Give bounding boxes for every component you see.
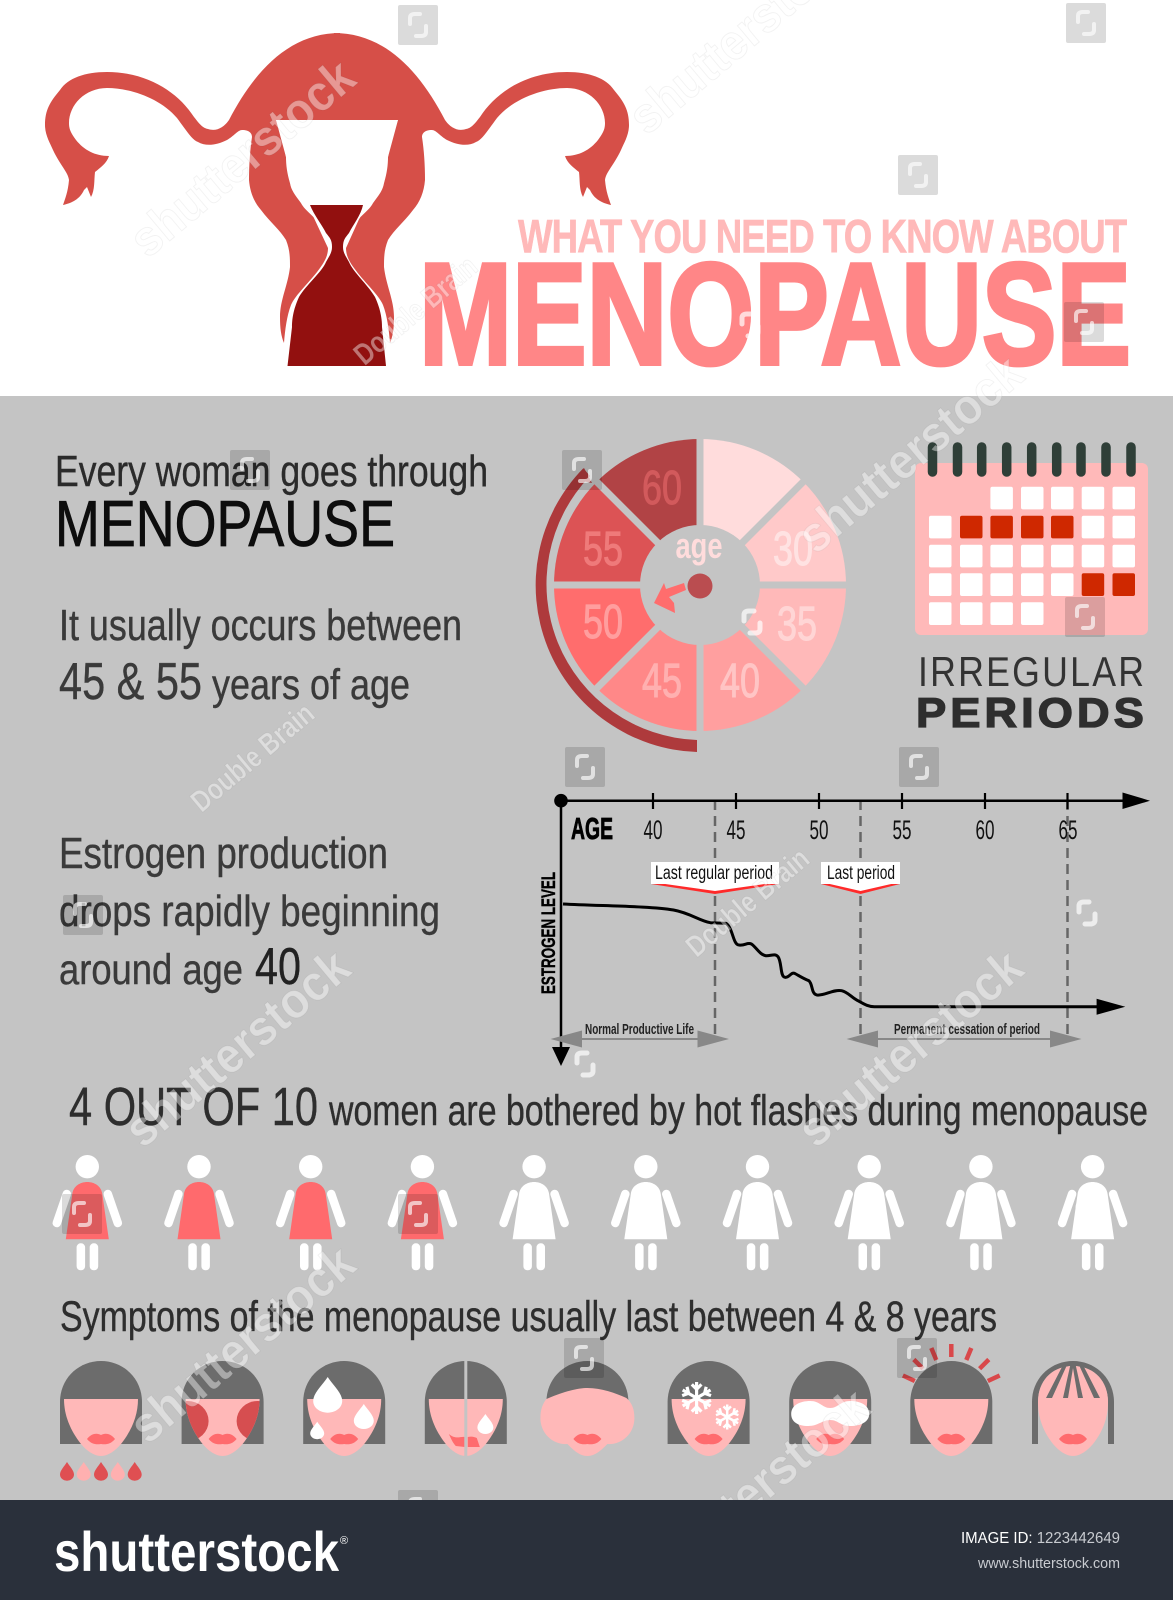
- wheel numbers: 50: [583, 596, 623, 649]
- span arrow: permanent cessation: Permanent cessation of period: [894, 1021, 1040, 1038]
- heading: irregular periods: PERIODS: [916, 690, 1144, 737]
- heading: irregular periods: [916, 649, 1144, 737]
- text block: age range: It usually occurs between: [59, 601, 462, 650]
- main grey panel: [0, 396, 1173, 1500]
- axis labels: 55: [892, 815, 912, 845]
- calendar rings: [932, 447, 1131, 472]
- footer logo: ®: [340, 1535, 348, 1547]
- text block: every woman: Every woman goes through: [55, 447, 488, 496]
- watermark: stock text: shutterstock: [787, 344, 1034, 564]
- callout: last period: [821, 862, 900, 894]
- span arrow: permanent cessation: [846, 1021, 1082, 1048]
- chart: age wheel: [536, 430, 850, 752]
- axes: [552, 792, 1150, 1066]
- wheel centre label: age: [676, 525, 722, 566]
- icon: bloating swollen face: [540, 1361, 634, 1456]
- icon: sweating: [303, 1361, 385, 1456]
- callout: last regular period: [651, 862, 779, 894]
- watermark: stock text: shutterstock: [114, 938, 361, 1158]
- estrogen curve: [563, 904, 1125, 1015]
- calendar period days: [960, 516, 1135, 596]
- text block: age range: 45 & 55: [59, 653, 202, 711]
- icon: chills snowflakes: [668, 1361, 750, 1456]
- heading: 4 out of 10: 4 OUT OF 10: [69, 1077, 318, 1137]
- axis title: estrogen level: ESTROGEN LEVEL: [539, 872, 560, 994]
- wheel numbers: 45: [642, 655, 682, 708]
- text block: every woman: MENOPAUSE: [55, 487, 395, 560]
- woman 2 highlighted: [168, 1155, 230, 1270]
- icon: uterus hourglass: [45, 33, 629, 366]
- watermark: stock text: [114, 0, 1034, 1597]
- text block: estrogen: [59, 829, 440, 996]
- woman 8: [839, 1155, 900, 1270]
- icon: mood swings split face: [425, 1358, 507, 1458]
- calendar days: [929, 487, 1135, 625]
- span arrow: normal productive life: [550, 1021, 729, 1048]
- icon: irregular calendar: [915, 447, 1148, 635]
- dashed guides: [715, 800, 1068, 1037]
- woman 10: [1062, 1155, 1123, 1270]
- watermark: stock text: shutterstock: [119, 48, 366, 268]
- text block: age range: [59, 601, 462, 711]
- watermark: outline marks: [71, 14, 1095, 1225]
- text block: estrogen: around age: [59, 946, 243, 994]
- wheel outer arc arrow: [536, 468, 697, 752]
- footer logo: shutterstock: [54, 1520, 340, 1583]
- woman 6: [615, 1155, 676, 1270]
- axis labels: 45: [726, 815, 746, 845]
- span arrow: normal productive life: Normal Productive Life: [585, 1021, 694, 1038]
- woman 9: [950, 1155, 1011, 1270]
- watermark: author text: Double Brain: [680, 842, 816, 964]
- wheel numbers: 30: [773, 523, 813, 576]
- text block: estrogen: drops rapidly beginning: [59, 887, 440, 936]
- watermark: author text: Double Brain: [185, 697, 321, 819]
- wheel numbers: 55: [583, 523, 623, 576]
- chart: estrogen level over age: [539, 792, 1150, 1066]
- woman 4 highlighted: [392, 1155, 453, 1270]
- wheel numbers: 40: [720, 655, 760, 708]
- heading: irregular periods: IRREGULAR: [918, 649, 1144, 696]
- heading: 4 out of 10: [69, 1077, 1148, 1137]
- axis labels: 50: [810, 815, 828, 845]
- title: what you need to know about: WHAT YOU NEED TO KNOW ABOUT: [518, 210, 1127, 263]
- watermark: author text: Double Brain: [348, 250, 484, 372]
- callout: last regular period: Last regular period: [655, 863, 773, 884]
- axis title: age: AGE: [571, 811, 613, 846]
- woman 5: [504, 1155, 565, 1270]
- icon: irregular bleeding: [60, 1361, 142, 1481]
- text block: estrogen: 40: [255, 938, 301, 996]
- watermark: stock text: shutterstock: [119, 1234, 366, 1454]
- watermark: stock text: shutterstock: [634, 1377, 881, 1597]
- axis labels: [644, 815, 1078, 845]
- woman 1 highlighted: [57, 1155, 118, 1270]
- callout: last period: Last period: [827, 863, 895, 884]
- wheel pointer: [654, 574, 712, 613]
- footer url: www.shutterstock.com: [977, 1555, 1120, 1572]
- wheel numbers: [583, 462, 817, 708]
- wheel numbers: 60: [642, 462, 682, 515]
- footer bar: [0, 1500, 1173, 1600]
- axis labels: 40: [644, 815, 662, 845]
- text block: age range: years of age: [212, 661, 410, 709]
- watermark: author text: [185, 250, 816, 964]
- text block: every woman: [55, 447, 488, 560]
- footer image id: IMAGE ID: 1223442649: [961, 1530, 1120, 1547]
- text block: estrogen: Estrogen production: [59, 829, 388, 878]
- icon: sleeping mask: [789, 1361, 871, 1456]
- woman 3 highlighted: [280, 1155, 341, 1270]
- icon: headache rays: [903, 1344, 1000, 1456]
- axis labels: 65: [1058, 815, 1078, 845]
- icon: hair thinning: [1032, 1361, 1114, 1456]
- pictogram: ten women, four highlighted: [57, 1155, 1123, 1270]
- wheel numbers: 35: [777, 598, 817, 651]
- symptom icons row: [60, 1344, 1114, 1481]
- icon: hot flush cheeks: [182, 1361, 264, 1456]
- wheel segments: [550, 430, 850, 740]
- watermark: stock text: shutterstock: [787, 938, 1034, 1158]
- axis labels: 60: [976, 815, 994, 845]
- woman 7: [727, 1155, 788, 1270]
- header background: [0, 0, 1173, 396]
